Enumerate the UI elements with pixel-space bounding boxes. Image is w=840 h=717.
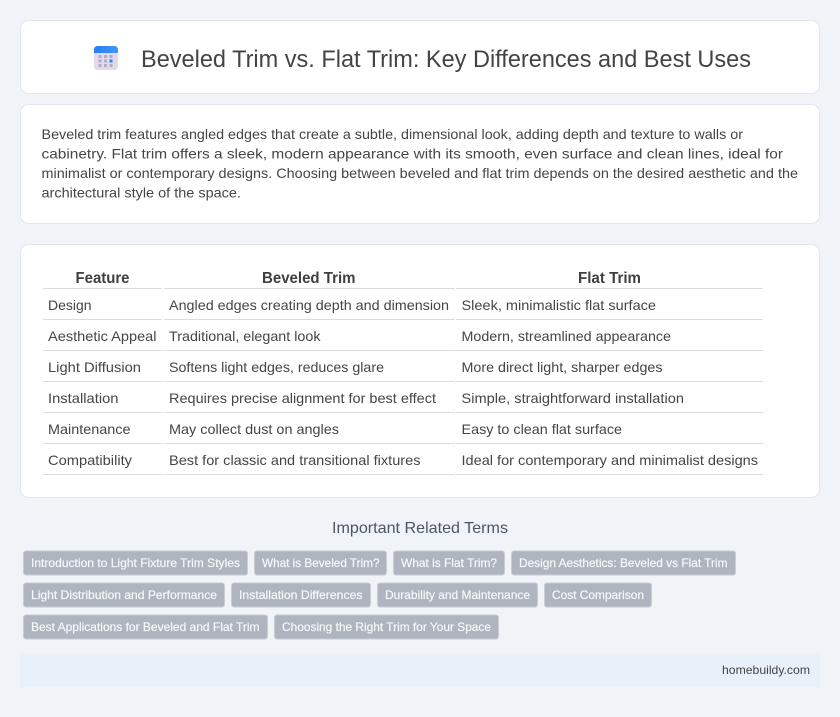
table header row: Beveled Trim — [262, 270, 356, 287]
row: compatibility: Compatibility — [48, 452, 132, 468]
tag — [394, 551, 504, 575]
row: aesthetic appeal: Aesthetic Appeal — [48, 328, 156, 344]
title: Beveled Trim vs. Flat Trim: Key Differences and Best Uses — [141, 46, 751, 73]
row: compatibility — [48, 452, 758, 468]
tag — [544, 583, 652, 607]
intro paragraph: cabinetry. Flat trim offers a sleek, modern appearance with its smooth, even surface and clean lines, ideal for — [42, 146, 783, 162]
table header row — [76, 270, 641, 287]
tag — [274, 615, 498, 639]
tag: Best Applications for Beveled and Flat Trim — [31, 620, 260, 634]
row: compatibility: Best for classic and transitional fixtures — [169, 452, 420, 468]
row: installation: Simple, straightforward installation — [462, 390, 684, 406]
tag — [24, 551, 248, 575]
tag: Design Aesthetics: Beveled vs Flat Trim — [519, 556, 728, 570]
row: installation: Installation — [48, 390, 118, 406]
row: aesthetic appeal: Traditional, elegant look — [169, 328, 322, 344]
tag — [512, 551, 736, 575]
heading: important related terms: Important Related Terms — [332, 520, 508, 537]
intro paragraph: Beveled trim features angled edges that create a subtle, dimensional look, adding depth and texture to walls or — [42, 126, 743, 142]
panel: introduction — [20, 104, 820, 224]
intro paragraph: minimalist or contemporary designs. Choosing between beveled and flat trim depends on the desired aesthetic and the — [42, 165, 798, 181]
row: installation — [48, 390, 684, 406]
tag — [24, 583, 224, 607]
row: design: Sleek, minimalistic flat surface — [462, 297, 656, 313]
header panel — [20, 20, 820, 94]
footer source text: homebuildy.com — [722, 663, 810, 677]
row: maintenance — [48, 421, 622, 437]
tag: Cost Comparison — [552, 588, 644, 602]
tag — [24, 615, 268, 639]
tag — [378, 583, 538, 607]
icon: calendar — [94, 46, 118, 70]
tag: What is Beveled Trim? — [262, 556, 380, 570]
related term tags — [24, 551, 736, 639]
row: compatibility: Ideal for contemporary and minimalist designs — [462, 452, 758, 468]
row: design: Design — [48, 297, 92, 313]
row: maintenance: May collect dust on angles — [169, 421, 339, 437]
tag — [232, 583, 370, 607]
tag — [254, 551, 386, 575]
tag: What is Flat Trim? — [401, 556, 497, 570]
row: light diffusion: Light Diffusion — [48, 359, 141, 375]
row: light diffusion: Softens light edges, reduces glare — [169, 359, 384, 375]
tag: Choosing the Right Trim for Your Space — [282, 620, 491, 634]
row: maintenance: Maintenance — [48, 421, 131, 437]
tag: Introduction to Light Fixture Trim Styles — [31, 556, 240, 570]
row: design: Angled edges creating depth and dimension — [169, 297, 449, 313]
intro paragraph — [42, 126, 798, 200]
intro paragraph: architectural style of the space. — [42, 184, 241, 200]
tag: Installation Differences — [239, 588, 362, 602]
row: light diffusion — [48, 359, 662, 375]
row: installation: Requires precise alignment for best effect — [169, 390, 436, 406]
row: light diffusion: More direct light, sharper edges — [462, 359, 662, 375]
table header row: Flat Trim — [578, 270, 641, 287]
table header row: Feature — [76, 270, 130, 287]
row: aesthetic appeal — [48, 328, 671, 344]
panel: comparison table — [20, 244, 820, 498]
tag: Light Distribution and Performance — [31, 588, 217, 602]
tag: Durability and Maintenance — [385, 588, 530, 602]
row: design — [48, 297, 656, 313]
footer — [20, 653, 820, 687]
row: maintenance: Easy to clean flat surface — [462, 421, 622, 437]
row: aesthetic appeal: Modern, streamlined appearance — [462, 328, 671, 344]
